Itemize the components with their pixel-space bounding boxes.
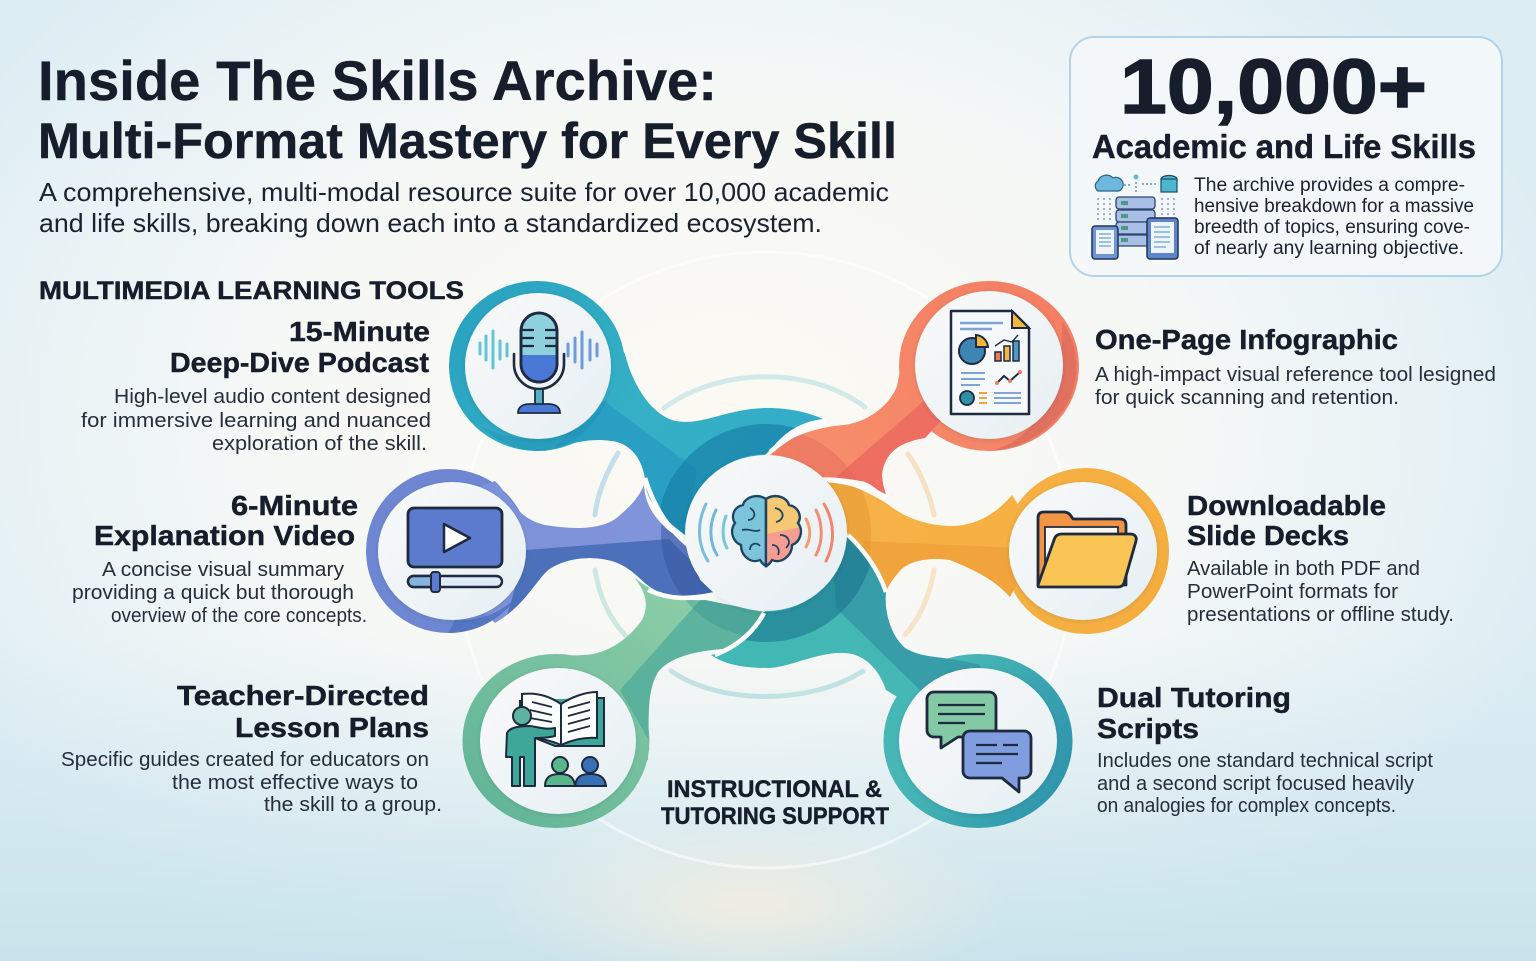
branch: blue video (366, 469, 714, 633)
video description: overview of the core concepts. (111, 604, 367, 627)
stat panel (1070, 37, 1502, 276)
icon: data server and tablets (1092, 174, 1178, 259)
stat description: breedth of topics, ensuring cove- (1194, 217, 1470, 238)
lesson description: Specific guides created for educators on (61, 748, 429, 771)
panel: lesson plans text (61, 680, 442, 816)
lesson heading (177, 680, 429, 743)
icon: folder (1038, 512, 1136, 587)
panel: infographic text (1095, 324, 1496, 409)
infographic heading: One-Page Infographic (1095, 324, 1398, 355)
stat description: of nearly any learning objective. (1194, 238, 1464, 259)
infographic description (1095, 363, 1496, 409)
podcast heading (170, 316, 430, 378)
section heading: instructional and tutoring support: INSTRUCTIONAL & (667, 776, 882, 803)
slide decks description: PowerPoint formats for (1187, 580, 1398, 603)
node: slide decks (1009, 482, 1157, 620)
icon: microphone (480, 313, 597, 413)
podcast heading: Deep-Dive Podcast (170, 347, 429, 378)
branch: coral infographic (770, 281, 1079, 494)
icon: brain left lobe (732, 496, 766, 566)
tutoring description: on analogies for complex concepts. (1097, 794, 1396, 817)
video heading (94, 490, 358, 551)
podcast heading: 15-Minute (289, 316, 430, 347)
branch: teal tutoring scripts (711, 535, 1072, 828)
subtitle (39, 177, 889, 238)
title: Multi-Format Mastery for Every Skill (38, 113, 897, 169)
stat description (1194, 175, 1474, 259)
stat description: hensive breakdown for a massive (1194, 196, 1474, 217)
infographic description: A high-impact visual reference tool lesigned (1095, 363, 1496, 386)
big number: 10,000+ (1120, 44, 1427, 130)
video description: A concise visual summary (102, 558, 345, 581)
slide decks description (1187, 557, 1454, 626)
lesson description (61, 748, 442, 816)
icon: sound waves (699, 504, 833, 561)
node: podcast (465, 293, 611, 439)
hub: brain (685, 455, 847, 611)
panel: tutoring scripts text (1097, 682, 1433, 817)
tutoring heading: Dual Tutoring (1097, 682, 1291, 713)
video heading: 6-Minute (231, 490, 358, 521)
icon: video player (408, 508, 502, 592)
stat description: The archive provides a compre- (1194, 175, 1465, 196)
video heading: Explanation Video (94, 520, 355, 551)
title (38, 49, 897, 169)
panel: podcast text (81, 316, 431, 455)
icon: brain right lobe (766, 496, 801, 566)
accent arcs around hub (595, 377, 934, 696)
stat label: Academic and Life Skills (1092, 128, 1476, 165)
slide decks heading: Slide Decks (1187, 520, 1349, 551)
branch: teal podcast (449, 281, 823, 535)
node: video (378, 482, 526, 620)
title: Inside The Skills Archive: (38, 49, 717, 112)
tutoring description: Includes one standard technical script (1097, 749, 1433, 772)
node: infographic (915, 291, 1063, 439)
podcast description: for immersive learning and nuanced (81, 409, 431, 432)
panel: slide decks text (1187, 490, 1454, 626)
video description (72, 558, 367, 627)
tutoring heading (1097, 682, 1291, 744)
podcast description: exploration of the skill. (212, 432, 427, 455)
subtitle: and life skills, breaking down each into a standardized ecosystem. (39, 208, 822, 238)
node: lesson plans (480, 668, 636, 814)
lesson description: the most effective ways to (172, 771, 418, 794)
slide decks heading: Downloadable (1187, 490, 1386, 521)
slide decks description: Available in both PDF and (1187, 557, 1420, 580)
section heading: instructional and tutoring support (661, 776, 889, 830)
icon: infographic document (951, 311, 1029, 414)
branch: orange slide decks (827, 468, 1169, 634)
icon: teacher with book and students (506, 692, 606, 786)
video description: providing a quick but thorough (72, 581, 354, 604)
lesson heading: Teacher-Directed (177, 680, 429, 711)
section heading: instructional and tutoring support: TUTORING SUPPORT (661, 803, 889, 830)
slide decks heading (1187, 490, 1386, 551)
section heading: multimedia learning tools: MULTIMEDIA LEARNING TOOLS (39, 277, 464, 305)
tutoring description (1097, 749, 1433, 817)
tutoring description: and a second script focused heavily (1097, 772, 1415, 795)
panel: video text (72, 490, 367, 627)
branch: green lesson plans (462, 577, 764, 828)
icon: chat bubbles (927, 692, 1031, 792)
hub ring (645, 421, 886, 655)
tutoring heading: Scripts (1097, 713, 1199, 744)
podcast description (81, 385, 431, 455)
subtitle: A comprehensive, multi-modal resource suite for over 10,000 academic (39, 177, 889, 207)
infographic description: for quick scanning and retention. (1095, 386, 1399, 409)
node: tutoring scripts (899, 668, 1057, 814)
slide decks description: presentations or offline study. (1187, 603, 1454, 626)
podcast description: High-level audio content designed (114, 385, 431, 408)
lesson description: the skill to a group. (264, 793, 442, 816)
lesson heading: Lesson Plans (235, 712, 429, 743)
